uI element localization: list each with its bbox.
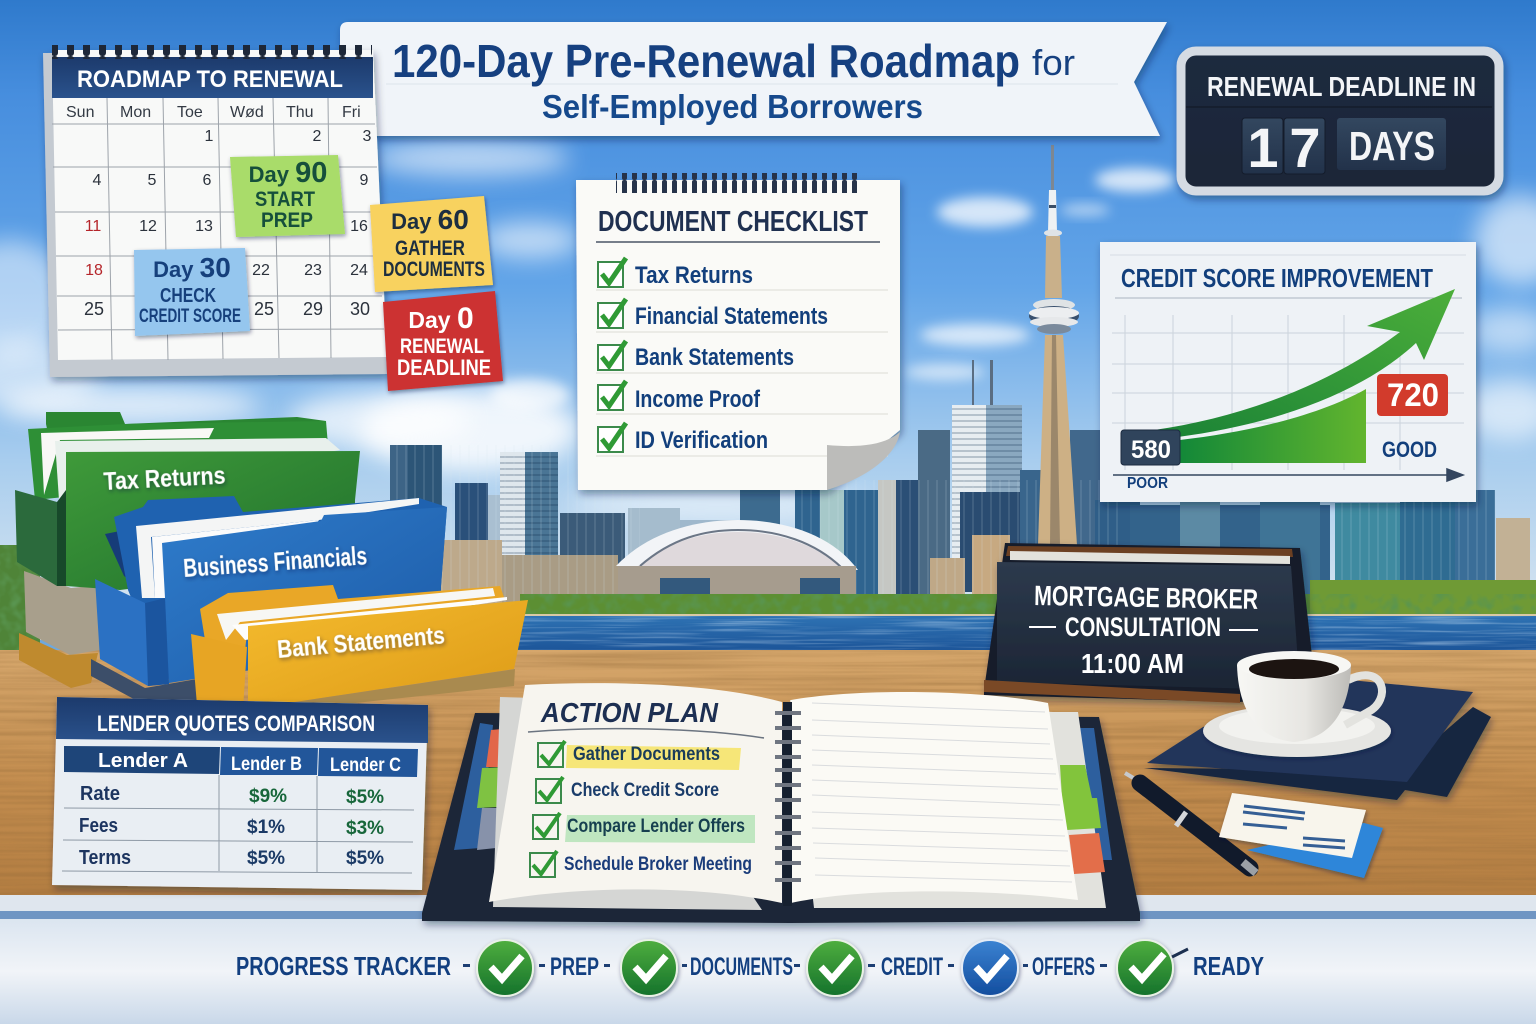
panel: credit score chart (1100, 242, 1476, 502)
calendar dates: 16 (350, 218, 368, 235)
calendar dates: 25 (84, 299, 104, 319)
notebook: action plan (422, 683, 1140, 923)
notebook cover (422, 713, 1140, 923)
row: rate: $5% (346, 787, 384, 808)
calendar weekdays: Thu (286, 104, 314, 121)
sticky note: day 90: Day 90 (249, 157, 327, 189)
checklist heading: DOCUMENT CHECKLIST (598, 206, 868, 238)
label good: GOOD (1382, 437, 1437, 462)
calendar dates: 3 (363, 128, 372, 145)
calendar dates: 12 (139, 218, 157, 235)
sign text: MORTGAGE BROKER (1034, 580, 1258, 615)
left page tabs (454, 723, 514, 850)
step: documents: DOCUMENTS (690, 953, 793, 981)
row: terms (79, 847, 384, 869)
row: rate: Rate (80, 783, 120, 805)
chart heading: CREDIT SCORE IMPROVEMENT (1121, 263, 1433, 293)
sticky note: day 90 (230, 155, 345, 237)
days label: DAYS (1349, 123, 1435, 169)
sticky note: day 0: DEADLINE (397, 355, 491, 380)
folders: business financials (91, 496, 447, 707)
checklist item: tax returns (598, 258, 753, 289)
action plan heading: ACTION PLAN (540, 697, 719, 728)
step: prep (477, 940, 599, 996)
sticky note: day 30: CREDIT SCORE (139, 306, 241, 327)
calendar dates: 18 (85, 262, 103, 279)
desk sign: mortgage broker consultation (984, 543, 1316, 703)
calendar weekdays: Sun (66, 104, 94, 121)
sticky note: day 60: GATHER (395, 237, 465, 260)
calendar dates: 23 (304, 262, 322, 279)
sign text: 11:00 AM (1081, 648, 1184, 679)
folders: business financials: Business Financials (182, 540, 368, 583)
calendar dates: 11 (85, 218, 101, 235)
row: fees: $3% (346, 818, 384, 839)
panel: calendar roadmap to renewal (43, 45, 503, 391)
action item: schedule broker meeting: Schedule Broker Meeting (564, 854, 752, 875)
step: ready: READY (1193, 951, 1264, 981)
calendar dates: 30 (350, 299, 370, 319)
row: terms: Terms (79, 847, 131, 869)
action item: compare lender offers (533, 813, 755, 843)
calendar dates: 5 (148, 172, 157, 189)
background: lake (510, 614, 1536, 654)
calendar weekdays (66, 104, 361, 121)
action item: gather documents: Gather Documents (573, 744, 720, 765)
label 580 (1121, 430, 1180, 465)
background: sky (0, 0, 1536, 640)
calendar header: ROADMAP TO RENEWAL (77, 66, 343, 93)
subtitle: Self-Employed Borrowers (542, 88, 923, 125)
step: documents (621, 940, 793, 996)
calendar dates: 1 (205, 128, 214, 145)
step: credit: CREDIT (881, 953, 943, 981)
banner: title (340, 22, 1167, 136)
flip digit 1: 1 (1247, 116, 1279, 179)
calendar header (52, 57, 373, 98)
checklist item: bank statements (598, 341, 794, 371)
panel: lender quotes comparison (52, 697, 428, 890)
sticky note: day 30 (134, 248, 250, 336)
checklist item: financial statements (598, 299, 828, 330)
folders: bank statements (191, 585, 528, 712)
table heading: LENDER QUOTES COMPARISON (97, 711, 375, 736)
calendar dates: 25 (254, 299, 274, 319)
label 720: 720 (1387, 377, 1439, 413)
heading: progress tracker: PROGRESS TRACKER (236, 951, 451, 981)
sticky note: day 60: DOCUMENTS (383, 258, 485, 281)
sticky note: day 0 (383, 291, 503, 391)
title word: for: for (1032, 42, 1075, 83)
calendar dates: 2 (313, 128, 322, 145)
action item: compare lender offers: Compare Lender Offers (567, 816, 745, 837)
row: terms: $5% (346, 848, 384, 869)
step: ready (1117, 940, 1264, 996)
checklist binding rings (616, 173, 860, 193)
growth arrow (1154, 289, 1455, 437)
background: Toronto skyline (390, 360, 1530, 613)
checklist item: tax returns: Tax Returns (635, 262, 753, 289)
table grid (62, 775, 414, 873)
table header row: Lender C (330, 755, 401, 776)
calendar dates: 29 (303, 299, 323, 319)
checklist item: id verification (598, 423, 768, 454)
sticky note: day 0: RENEWAL (400, 335, 484, 358)
countdown heading: RENEWAL DEADLINE IN (1207, 71, 1476, 102)
calendar dates: 24 (350, 262, 368, 279)
flip digit 7: 7 (1289, 116, 1321, 179)
checklist item: income proof (598, 381, 761, 413)
calendar weekdays: Wød (230, 104, 264, 121)
row: rate: $9% (249, 786, 287, 807)
row: rate (80, 783, 384, 808)
calendar weekdays: Mon (120, 104, 151, 121)
step: offers: OFFERS (1032, 953, 1095, 981)
label 720 (1377, 374, 1448, 416)
label poor: POOR (1127, 475, 1168, 492)
label 580: 580 (1131, 436, 1171, 464)
step: credit (807, 940, 943, 996)
sticky note: day 30: Day 30 (153, 252, 231, 283)
sticky note: day 90: PREP (261, 209, 313, 232)
icon: pen (1125, 773, 1256, 873)
chart grid (1112, 315, 1464, 470)
left page (489, 683, 782, 910)
row: terms: $5% (247, 848, 285, 869)
table header row: Lender A (98, 750, 188, 772)
page curl (827, 432, 900, 490)
sticky note: day 60: Day 60 (391, 204, 469, 235)
icon: leather portfolio (1144, 680, 1491, 800)
calendar weekdays: Toe (177, 104, 203, 121)
row: fees: $1% (247, 817, 285, 838)
right page tabs and underlay (790, 700, 1112, 908)
background: shoreline trees (0, 545, 1536, 650)
folders: tax returns (15, 412, 360, 590)
calendar dates (84, 128, 372, 319)
folders: bank statements: Bank Statements (276, 621, 446, 664)
step: offers (962, 940, 1095, 996)
calendar dates: 4 (93, 172, 102, 189)
calendar dates: 13 (195, 218, 213, 235)
action item: check credit score (536, 777, 719, 803)
step: prep: PREP (550, 953, 599, 981)
spiral binding (775, 702, 801, 906)
right page (791, 692, 1078, 903)
checklist item: bank statements: Bank Statements (635, 344, 794, 371)
sign text: CONSULTATION (1065, 612, 1221, 642)
sign text (1029, 580, 1258, 679)
folders: storage boxes (19, 571, 100, 688)
calendar binding rings (52, 45, 372, 59)
action item: gather documents (538, 741, 741, 770)
action item: schedule broker meeting (530, 851, 752, 877)
table header row (64, 746, 418, 777)
background: wooden desk (0, 650, 1536, 912)
icon: CN Tower (1029, 145, 1079, 545)
checklist item: income proof: Income Proof (635, 386, 761, 413)
checklist item: id verification: ID Verification (635, 427, 768, 454)
calendar grid (52, 98, 384, 360)
title text: 120-Day Pre-Renewal Roadmap (392, 35, 1020, 87)
background: clouds (0, 140, 1536, 521)
sticky note: day 0: Day 0 (408, 302, 474, 335)
axis (1113, 469, 1463, 481)
connector dashes (463, 964, 1107, 967)
sticky note: day 30: CHECK (160, 285, 216, 307)
sticky note: day 60 (370, 196, 493, 292)
checklist item: financial statements: Financial Statements (635, 303, 828, 330)
icon: business cards (1219, 793, 1383, 878)
calendar dates: 22 (252, 262, 270, 279)
panel: renewal deadline countdown (1181, 51, 1499, 191)
table header row: Lender B (231, 754, 302, 775)
green area (1180, 389, 1366, 463)
calendar dates: 9 (360, 172, 369, 189)
calendar weekdays: Fri (342, 104, 361, 121)
sticky note: day 90: START (255, 188, 315, 211)
action item: check credit score: Check Credit Score (571, 780, 719, 801)
calendar dates: 6 (203, 172, 212, 189)
row: fees (79, 815, 384, 839)
row: fees: Fees (79, 815, 118, 837)
folders: tax returns: Tax Returns (103, 462, 226, 496)
panel: document checklist (576, 173, 900, 490)
icon: stadium dome (616, 520, 858, 604)
panel: progress tracker strip (0, 895, 1536, 1024)
table heading (56, 697, 428, 743)
icon: coffee cup and saucer (1203, 651, 1391, 757)
